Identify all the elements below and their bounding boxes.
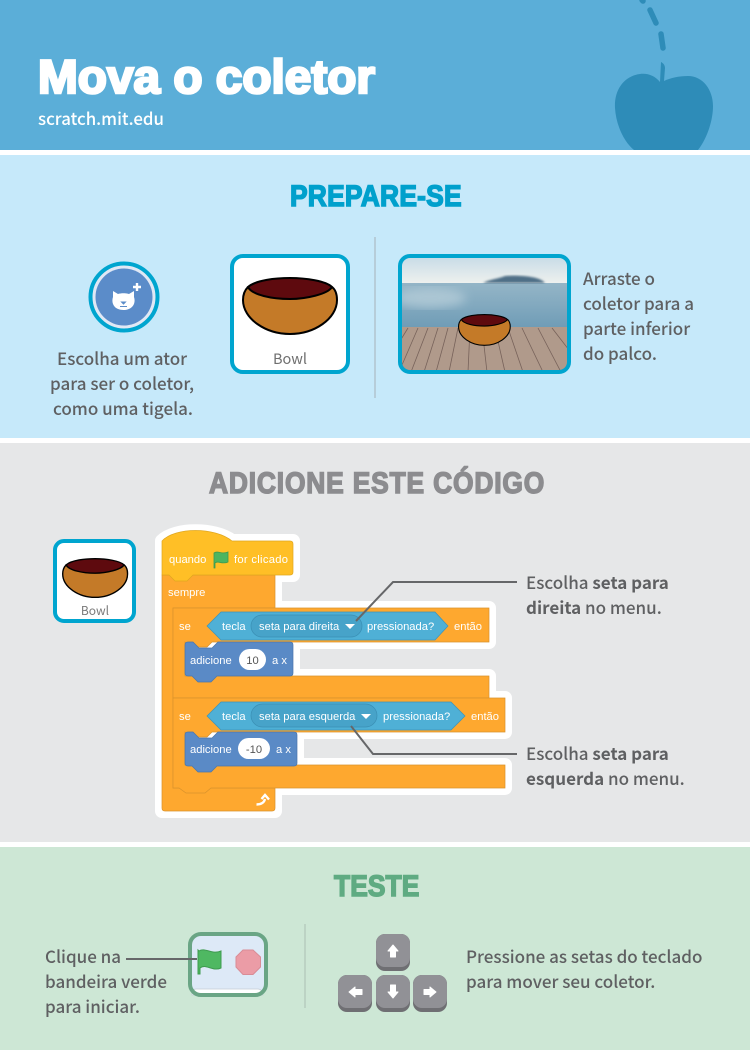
block: add -10: a x <box>276 744 291 756</box>
block: add 10 <box>185 642 293 682</box>
stage controls <box>190 934 266 995</box>
arrow keys <box>338 934 447 1012</box>
url: scratch.mit.edu <box>38 105 164 130</box>
icon: stop sign <box>236 950 260 974</box>
callout line: left <box>351 726 517 754</box>
text: choose a sprite: para ser o coletor, <box>50 370 194 395</box>
boolean: key left: tecla <box>222 711 246 723</box>
label: sempre: sempre <box>168 587 205 599</box>
callout text: right: direita no menu. <box>526 594 662 619</box>
block: add -10: adicione <box>190 744 232 756</box>
sprite card: bowl: Bowl <box>273 348 307 369</box>
boolean: key left <box>207 702 465 730</box>
block: add -10: -10 <box>246 744 262 756</box>
block: add 10: a x <box>272 655 287 667</box>
sprite card: bowl <box>232 256 348 372</box>
boolean: key left: seta para esquerda <box>259 711 356 723</box>
panel: prepare-se <box>0 155 750 438</box>
block: add 10: adicione <box>190 655 232 667</box>
text: choose a sprite: Escolha um ator <box>57 345 187 370</box>
icon: green flag <box>198 950 221 974</box>
callout text: right: Escolha seta para <box>526 569 669 594</box>
icon: small green flag <box>214 552 228 568</box>
text: drag collector: do palco. <box>583 340 657 365</box>
text: drag collector: parte inferior <box>583 315 690 340</box>
label: entao 2: então <box>471 711 499 723</box>
icon: loop arrow <box>256 795 269 804</box>
callout line: right <box>356 582 517 621</box>
label: se 1: se <box>179 621 191 633</box>
text: click flag: para iniciar. <box>45 993 140 1018</box>
key: left <box>338 975 372 1012</box>
heading: add this code: ADICIONE ESTE CÓDIGO <box>209 465 544 499</box>
panel: adicione este codigo <box>0 443 750 842</box>
stage photo with bowl <box>394 256 569 372</box>
sprite card: small bowl <box>55 541 134 621</box>
text: click flag: Clique na <box>45 943 121 968</box>
text: click flag: bandeira verde <box>45 968 167 993</box>
callout text: left: esquerda no menu. <box>526 765 685 790</box>
boolean: key right: seta para direita <box>259 621 340 633</box>
icon: choose sprite button <box>90 264 158 330</box>
text: press arrows: para mover seu coletor. <box>466 968 655 993</box>
text: drag collector: coletor para a <box>583 290 694 315</box>
heading: teste: TESTE <box>334 868 419 902</box>
label: se 2: se <box>179 711 191 723</box>
stack outline <box>162 531 505 811</box>
boolean: key left: pressionada? <box>383 711 450 723</box>
panel: teste <box>0 847 750 1050</box>
hat text end: for clicado <box>234 554 288 566</box>
icon: falling apple with dashed trail <box>615 0 713 150</box>
text: drag collector: Arraste o <box>583 265 655 290</box>
label: entao 1: então <box>454 621 482 633</box>
boolean: key right: pressionada? <box>367 621 434 633</box>
hat block <box>162 530 293 581</box>
key: up <box>376 934 410 971</box>
title: Mova o coletor <box>38 50 375 103</box>
text: press arrows: Pressione as setas do teclado <box>466 943 702 968</box>
panel: header <box>0 0 750 150</box>
key: right <box>413 975 447 1012</box>
hat text: quando <box>169 554 206 566</box>
callout text: left: Escolha seta para <box>526 740 669 765</box>
text: choose a sprite: como uma tigela. <box>53 395 193 420</box>
code stack <box>162 530 505 811</box>
key: down <box>376 975 410 1012</box>
boolean: key right <box>207 612 448 640</box>
block: add -10 <box>185 732 297 772</box>
forever and if blocks <box>162 575 505 811</box>
callout line: flag <box>126 958 197 960</box>
block: add 10: 10 <box>246 655 259 667</box>
heading: prepare-se: PREPARE-SE <box>290 178 462 212</box>
sprite card: small bowl: Bowl <box>81 602 109 619</box>
boolean: key right: tecla <box>222 621 246 633</box>
